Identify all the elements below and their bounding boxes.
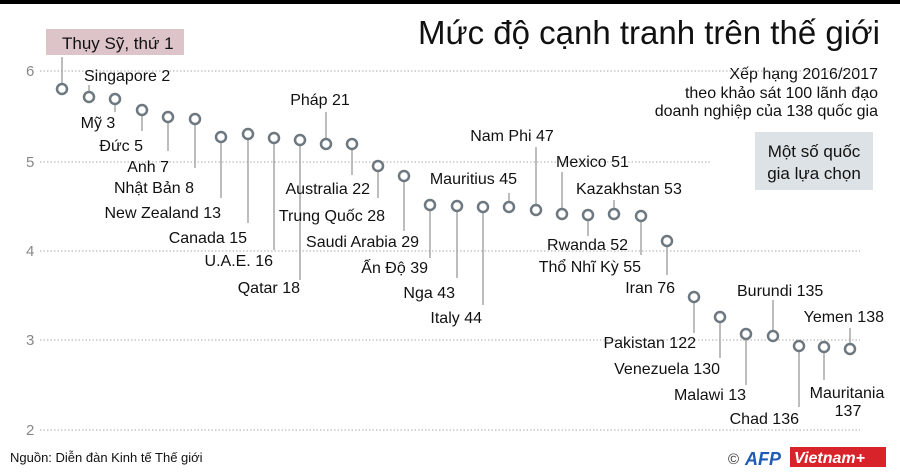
title: Mức độ cạnh tranh trên thế giới	[418, 14, 880, 51]
logo: AFP	[744, 449, 782, 469]
country labels: Saudi Arabia 29	[306, 234, 419, 251]
country labels: Pakistan 122	[603, 335, 696, 352]
legend box: gia lựa chọn	[767, 164, 861, 183]
source: Nguồn: Diễn đàn Kinh tế Thế giới	[10, 450, 203, 465]
logo: Vietnam+	[794, 450, 865, 467]
logo	[728, 447, 886, 469]
country labels: Pháp 21	[290, 92, 350, 109]
country labels: Mauritius 45	[430, 171, 517, 188]
country labels: Anh 7	[127, 159, 169, 176]
country labels: Chad 136	[730, 411, 799, 428]
country labels: Nga 43	[403, 285, 455, 302]
country labels	[81, 68, 884, 428]
country labels: Mexico 51	[556, 154, 629, 171]
highlight box: Thụy Sỹ: Thụy Sỹ, thứ 1	[62, 34, 174, 53]
y axis: 4	[26, 243, 34, 260]
y axis: 2	[26, 422, 34, 439]
country labels: U.A.E. 16	[205, 253, 273, 270]
logo: ©	[728, 451, 739, 468]
subtitle: Xếp hạng 2016/2017	[729, 66, 878, 83]
country labels: Qatar 18	[238, 280, 300, 297]
country labels: Nhật Bản 8	[114, 180, 194, 197]
country labels: Malawi 13	[674, 387, 746, 404]
country labels: Thổ Nhĩ Kỳ 55	[539, 258, 641, 276]
country labels: Ấn Độ 39	[361, 258, 428, 277]
country labels: Canada 15	[169, 230, 247, 247]
country labels: Mauritania	[810, 385, 884, 402]
y axis: 3	[26, 332, 34, 349]
y axis	[26, 63, 34, 439]
country labels: Đức 5	[99, 138, 143, 155]
country labels: Venezuela 130	[614, 361, 720, 378]
country labels: Italy 44	[430, 310, 482, 327]
country labels: Rwanda 52	[547, 237, 628, 254]
country labels: Australia 22	[286, 181, 370, 198]
subtitle: theo khảo sát 100 lãnh đạo	[685, 85, 878, 102]
legend box: Một số quốc	[768, 142, 861, 161]
country labels: Mỹ 3	[81, 115, 115, 132]
country labels: Iran 76	[625, 280, 675, 297]
highlight box: Thụy Sỹ	[46, 29, 184, 55]
country labels: Burundi 135	[737, 283, 823, 300]
country labels: 137	[835, 403, 861, 420]
subtitle	[655, 66, 878, 120]
leader lines	[62, 57, 850, 407]
country labels: Trung Quốc 28	[279, 208, 385, 225]
country labels: Nam Phi 47	[470, 128, 554, 145]
country labels: New Zealand 13	[104, 205, 221, 222]
country labels: Yemen 138	[804, 309, 884, 326]
y axis: 6	[26, 63, 34, 80]
y axis: 5	[26, 154, 34, 171]
legend box	[755, 132, 873, 190]
subtitle: doanh nghiệp của 138 quốc gia	[655, 103, 878, 120]
dots	[57, 84, 855, 354]
country labels: Kazakhstan 53	[576, 181, 682, 198]
country labels: Singapore 2	[84, 68, 170, 85]
